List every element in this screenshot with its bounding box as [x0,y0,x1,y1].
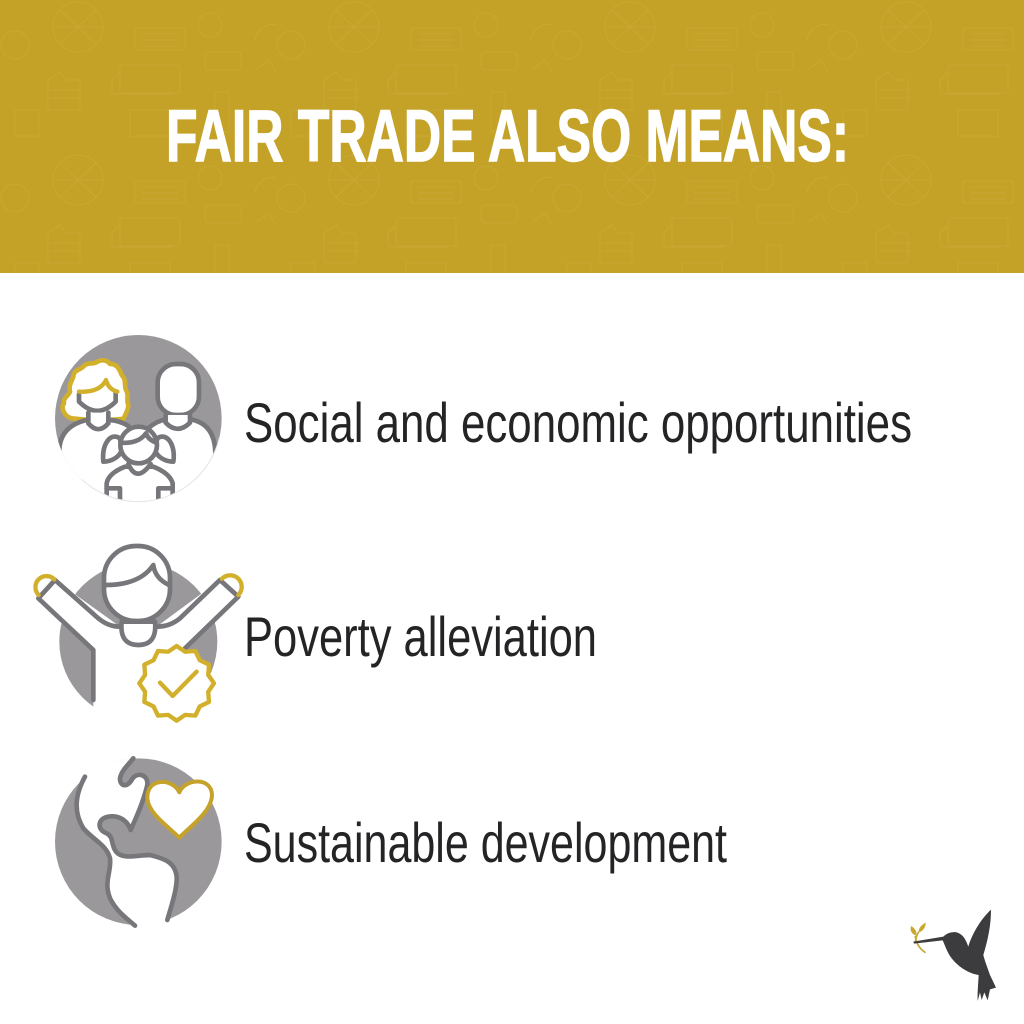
logo: hummingbird with branch [911,910,996,1001]
icon: person with raised arms and badge [35,546,242,733]
icon: check badge [139,646,214,721]
text: sustainable development: Sustainable development [244,811,727,874]
icon: globe with heart [55,758,222,926]
header banner [0,0,1024,273]
text: poverty alleviation: Poverty alleviation [244,605,597,668]
icon: family [53,335,223,507]
icon: heart [147,782,212,838]
